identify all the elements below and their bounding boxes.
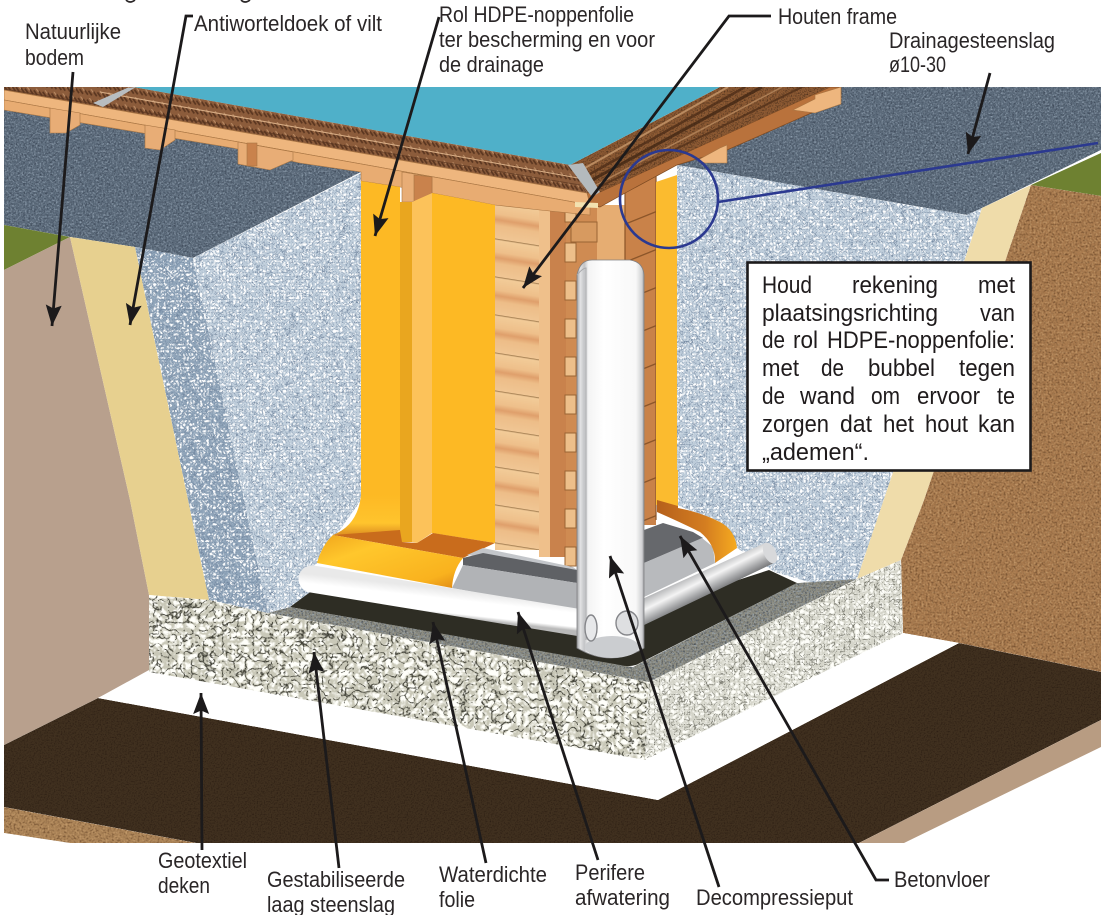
callout: plaatsingsrichting: met bbox=[762, 355, 799, 382]
callout: plaatsingsrichting: rekening bbox=[852, 272, 938, 299]
stabilised stone layer front bbox=[149, 595, 649, 760]
decompression well bbox=[577, 260, 644, 658]
yellow foil right bbox=[656, 175, 677, 505]
callout: plaatsingsrichting bbox=[748, 262, 1030, 470]
label: antiworteldoek: Antiworteldoek of vilt bbox=[194, 11, 382, 36]
arrow: noppenfolie bbox=[375, 17, 439, 236]
tan soil strip bbox=[859, 720, 1101, 843]
arrow: antiworteldoek bbox=[130, 16, 193, 325]
label: noppenfolie bbox=[439, 2, 655, 77]
label: perifere afwatering bbox=[575, 860, 670, 910]
callout: plaatsingsrichting: Houd bbox=[762, 272, 812, 299]
arrow: houten frame bbox=[523, 16, 771, 288]
callout connector line bbox=[718, 143, 1098, 202]
callout: plaatsingsrichting: kan bbox=[978, 411, 1015, 438]
geotextile blanket bbox=[98, 633, 959, 800]
label: waterdichte folie bbox=[439, 862, 547, 912]
label: decompressieput: Decompressieput bbox=[696, 885, 853, 910]
stone layer top surface bbox=[268, 579, 857, 682]
callout: plaatsingsrichting: ervoor bbox=[917, 383, 980, 410]
grass left bbox=[4, 225, 70, 270]
wood post bbox=[539, 192, 567, 557]
callout: plaatsingsrichting: plaatsingsrichting bbox=[762, 300, 938, 327]
arrow: geotextiel bbox=[201, 693, 202, 850]
cork soil bottom left bbox=[4, 807, 196, 843]
label: waterdichte folie: Waterdichte bbox=[439, 862, 547, 887]
label: gestabiliseerde laag steenslag: Gestabiliseerde bbox=[267, 867, 405, 892]
detail circle bbox=[620, 150, 718, 248]
drain pipe right bbox=[640, 543, 776, 627]
felt left bbox=[70, 237, 209, 600]
label: geotextiel deken: Geotextiel bbox=[158, 848, 247, 873]
callout: plaatsingsrichting: tegen bbox=[959, 355, 1015, 382]
callout: plaatsingsrichting: de bbox=[762, 327, 785, 354]
natural soil right bbox=[901, 185, 1101, 672]
callout: plaatsingsrichting: van bbox=[980, 300, 1015, 327]
drain pipe right end cap bbox=[760, 540, 780, 566]
callout: plaatsingsrichting: zorgen bbox=[762, 411, 829, 438]
foil curl left bbox=[333, 495, 400, 536]
label: geotextiel deken bbox=[158, 848, 247, 898]
callout: plaatsingsrichting: hout bbox=[925, 411, 968, 438]
arrow: drainagesteenslag bbox=[968, 73, 990, 154]
wood wall right bbox=[566, 170, 656, 560]
drainage stone cut face left bbox=[135, 247, 268, 613]
arrow: natuurlijke bodem bbox=[52, 72, 73, 326]
callout: plaatsingsrichting: rol bbox=[793, 327, 818, 354]
dovetail log ends bbox=[565, 205, 597, 566]
label: natuurlijke bodem: bodem bbox=[25, 45, 84, 70]
drainage stone light wall right bbox=[677, 165, 982, 587]
arrow: waterdichte folie bbox=[433, 622, 486, 863]
foil roll left bbox=[317, 535, 463, 588]
callout: plaatsingsrichting: te bbox=[997, 383, 1015, 410]
label: gestabiliseerde laag steenslag bbox=[267, 867, 405, 915]
corner bracket bbox=[568, 163, 600, 197]
callout: plaatsingsrichting: de bbox=[821, 355, 844, 382]
arrow: gestabiliseerde laag bbox=[314, 652, 339, 868]
arrow: perifere afwatering bbox=[518, 612, 598, 860]
deck planks right bbox=[570, 87, 830, 193]
cream corner strip bbox=[575, 202, 598, 208]
felt right bbox=[857, 185, 1031, 579]
callout: plaatsingsrichting: met bbox=[978, 272, 1015, 299]
pool water bbox=[133, 87, 720, 165]
wood wall left bbox=[495, 190, 541, 550]
deck joint bracket bbox=[93, 87, 136, 107]
label: natuurlijke bodem bbox=[25, 19, 121, 70]
label: waterdichte folie: folie bbox=[439, 887, 475, 912]
callout: plaatsingsrichting: „ademen“. bbox=[762, 439, 869, 466]
deck planks left bbox=[4, 87, 587, 193]
label: perifere afwatering: afwatering bbox=[575, 885, 670, 910]
foil curl right bbox=[657, 480, 737, 563]
label: noppenfolie: Rol HDPE-noppenfolie bbox=[439, 2, 634, 27]
label: noppenfolie: de drainage bbox=[439, 52, 544, 77]
foil floor left bbox=[333, 530, 495, 558]
label: drainagesteenslag bbox=[889, 28, 1055, 77]
label: houten frame: Houten frame bbox=[778, 4, 897, 29]
concrete floor right bbox=[644, 523, 715, 597]
label: drainagesteenslag: Drainagesteenslag bbox=[889, 28, 1055, 53]
label: perifere afwatering: Perifere bbox=[575, 860, 645, 885]
arrow: decompressieput bbox=[610, 556, 719, 887]
drainage stone surface right bbox=[677, 87, 1101, 215]
label: noppenfolie: ter bescherming en voor bbox=[439, 27, 655, 52]
dark floor bbox=[4, 643, 1101, 843]
callout: plaatsingsrichting: HDPE-noppenfolie: bbox=[827, 327, 1015, 354]
recessed beam left bbox=[4, 100, 590, 215]
foil right lower bbox=[657, 470, 678, 506]
concrete floor left bbox=[452, 548, 577, 611]
top clipped label remnant bbox=[126, 0, 250, 2]
label: natuurlijke bodem: Natuurlijke bbox=[25, 19, 121, 44]
callout: plaatsingsrichting: het bbox=[883, 411, 914, 438]
drainage stone light wall left bbox=[193, 173, 361, 613]
label: drainagesteenslag: ø10-30 bbox=[889, 52, 946, 77]
grass right bbox=[1031, 153, 1101, 196]
drainage stone surface left bbox=[4, 105, 361, 258]
fascia left bbox=[4, 90, 590, 205]
arrow: betonvloer bbox=[680, 536, 889, 880]
label: betonvloer: Betonvloer bbox=[894, 867, 990, 892]
label: geotextiel deken: deken bbox=[158, 873, 210, 898]
waterproof membrane bbox=[290, 570, 797, 666]
yellow foil left bbox=[361, 181, 495, 543]
callout: plaatsingsrichting: wand bbox=[799, 383, 855, 410]
natural soil left bbox=[4, 237, 149, 745]
callout: plaatsingsrichting: de bbox=[762, 383, 785, 410]
callout: plaatsingsrichting: om bbox=[871, 383, 900, 410]
fixed support posts bbox=[50, 87, 841, 202]
fascia right bbox=[587, 87, 841, 207]
stabilised stone layer side bbox=[645, 560, 903, 760]
callout: plaatsingsrichting: dat bbox=[840, 411, 872, 438]
callout: plaatsingsrichting: bubbel bbox=[868, 355, 935, 382]
drain pipe left bbox=[312, 579, 600, 626]
